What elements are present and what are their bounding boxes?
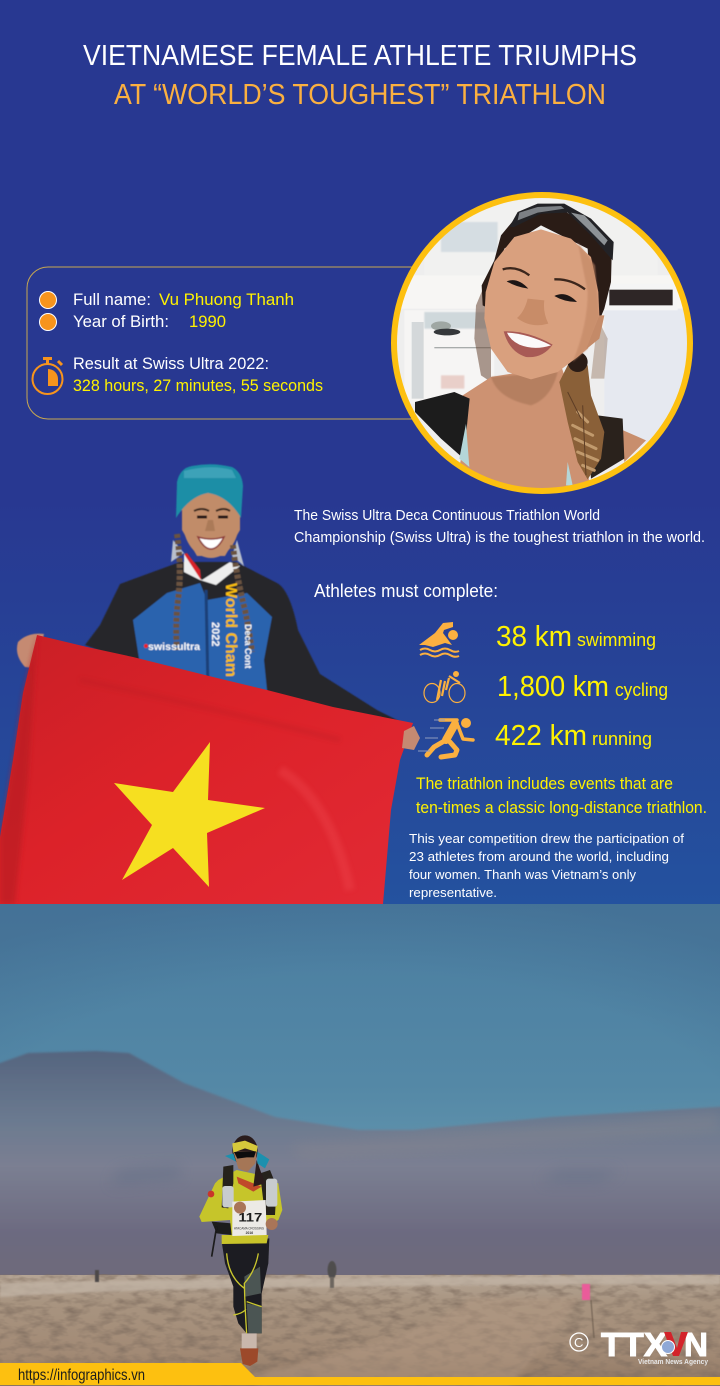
icon: swimming xyxy=(419,622,459,657)
text: swimming distance: 38 km xyxy=(496,621,572,653)
text: year of birth xyxy=(73,312,226,331)
photo: athlete running in desert xyxy=(0,904,720,1386)
Vietnamese flag xyxy=(0,635,420,904)
runner: 2016 xyxy=(246,1231,253,1235)
logo: TTXVN Vietnam News Agency: TTX xyxy=(601,1326,667,1363)
photo: athlete holding Vietnamese flag xyxy=(0,464,420,904)
footer band xyxy=(0,1363,720,1385)
photo: portrait of Vu Phuong Thanh xyxy=(391,192,693,494)
text: about Swiss Ultra: Championship (Swiss Ultra) is the toughest triathlon in the world. xyxy=(294,530,705,546)
text: participation note: four women. Thanh was Vietnam’s only xyxy=(409,867,636,882)
icon: running xyxy=(418,718,473,757)
hair wisps behind xyxy=(474,285,491,382)
text: swimming distance: swimming xyxy=(577,630,656,650)
runner: ATACAMA CROSSING xyxy=(234,1227,264,1231)
hair xyxy=(482,207,612,320)
text: running distance: 422 km xyxy=(495,720,587,752)
nose and mouth xyxy=(517,299,548,325)
text: year of birth: 1990 xyxy=(189,312,226,331)
right hand xyxy=(402,726,420,750)
runner: 117 xyxy=(238,1210,263,1224)
text: athletes must complete: Athletes must complete: xyxy=(314,581,498,601)
text: cycling distance: cycling xyxy=(615,680,668,700)
logo: TTXVN Vietnam News Agency xyxy=(570,1326,708,1366)
text: about Swiss Ultra xyxy=(294,508,705,546)
icon: stopwatch xyxy=(32,357,62,394)
athlete figure: 2022 xyxy=(209,622,221,646)
athlete figure xyxy=(17,464,405,724)
logo: TTXVN Vietnam News Agency: Vietnam News Agency xyxy=(638,1359,708,1366)
braid xyxy=(559,359,604,479)
text: about Swiss Ultra: The Swiss Ultra Deca Continuous Triathlon World xyxy=(294,508,600,524)
text: result: 328 hours, 27 minutes, 55 seconds xyxy=(73,376,323,395)
athlete figure: World Cham xyxy=(222,583,239,677)
text: swimming distance xyxy=(496,621,656,653)
shoulders and chest xyxy=(460,368,589,488)
title: AT “WORLD’S TOUGHEST” TRIATHLON xyxy=(114,79,606,111)
panel: athlete profile xyxy=(27,267,412,419)
athlete figure: Deca Cont xyxy=(243,624,253,669)
icon: bullet year of birth xyxy=(40,314,56,330)
text: result: Result at Swiss Ultra 2022: xyxy=(73,354,269,373)
text: participation note: This year competition drew the participation of xyxy=(409,831,684,846)
sunglasses xyxy=(509,204,614,260)
star xyxy=(114,742,265,887)
text: full name: Full name: xyxy=(73,290,151,309)
icon: cycling xyxy=(424,671,465,702)
logo: TTXVN Vietnam News Agency: N xyxy=(684,1326,708,1363)
face xyxy=(484,229,599,379)
logo: TTXVN Vietnam News Agency: C xyxy=(574,1335,583,1350)
brows and eyes xyxy=(503,268,529,275)
title: VIETNAMESE FEMALE ATHLETE TRIUMPHS xyxy=(83,40,637,72)
runner xyxy=(199,1135,282,1366)
text: full name: Vu Phuong Thanh xyxy=(159,290,294,309)
text: participation note: representative. xyxy=(409,885,497,900)
text: running distance xyxy=(495,720,652,752)
icon: bullet full name xyxy=(40,292,56,308)
footer url: https://infographics.vn xyxy=(18,1367,145,1384)
text: triathlon comparison xyxy=(416,774,707,817)
page background xyxy=(0,0,720,906)
text: year of birth: Year of Birth: xyxy=(73,312,169,331)
text: participation note: 23 athletes from around the world, including xyxy=(409,849,669,864)
text: cycling distance xyxy=(497,671,668,703)
title xyxy=(83,40,637,111)
text: full name xyxy=(73,290,294,309)
athlete figure: swissultra xyxy=(148,642,200,653)
distant runners and marker xyxy=(95,1261,594,1338)
text: cycling distance: 1,800 km xyxy=(497,671,609,703)
text: triathlon comparison: The triathlon includes events that are xyxy=(416,774,673,793)
text: participation note xyxy=(409,831,684,900)
text: result xyxy=(73,354,323,395)
text: running distance: running xyxy=(592,729,652,749)
top straps xyxy=(415,392,470,459)
